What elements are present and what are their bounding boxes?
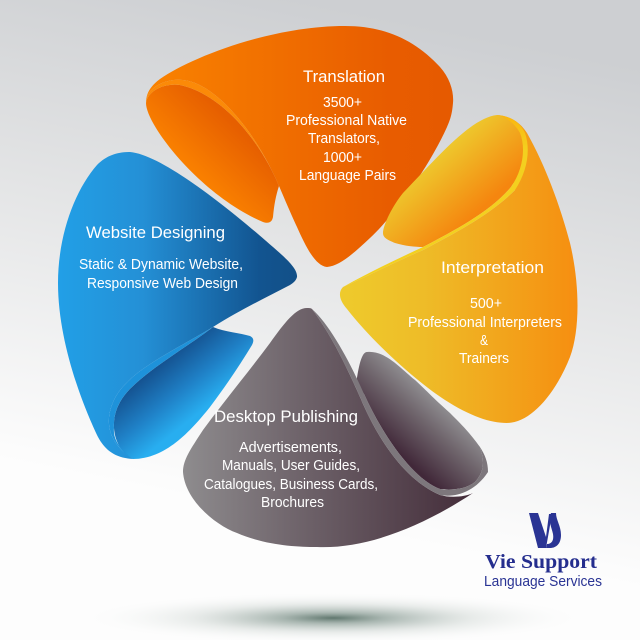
- company tagline: Language Services: [484, 574, 602, 590]
- orange fold: [146, 85, 279, 223]
- translation text: Language Pairs: [299, 168, 396, 184]
- desktop publishing text: Advertisements,: [239, 440, 342, 456]
- yellow fold: [383, 115, 523, 247]
- grey fold edge: [312, 309, 488, 496]
- orange petal: [146, 26, 453, 267]
- panel: desktop publishing: [183, 308, 488, 547]
- yellow fold edge: [343, 115, 528, 287]
- translation text: Translators,: [308, 131, 380, 147]
- interpretation heading: Interpretation: [441, 258, 544, 277]
- website text: [79, 257, 243, 292]
- interpretation text: 500+: [470, 296, 502, 312]
- icon: VS monogram: [529, 513, 561, 548]
- translation text: Professional Native: [286, 113, 407, 129]
- blue fold: [114, 327, 253, 459]
- ground shadow: [78, 592, 588, 640]
- website text: Static & Dynamic Website,: [79, 257, 243, 273]
- translation text: 3500+: [323, 95, 362, 111]
- interpretation text: &: [480, 333, 488, 349]
- grey petal: [183, 308, 473, 547]
- logo: [484, 513, 602, 590]
- interpretation text: Professional Interpreters: [408, 315, 562, 331]
- blue petal: [58, 152, 297, 459]
- website text: Responsive Web Design: [87, 276, 238, 292]
- website heading: Website Designing: [86, 223, 225, 242]
- desktop publishing text: Manuals, User Guides,: [222, 458, 360, 474]
- panel: interpretation: [340, 115, 578, 423]
- translation text: [286, 95, 407, 184]
- grey fold: [356, 352, 483, 489]
- blue fold edge: [109, 327, 213, 459]
- orange fold edge: [146, 80, 279, 186]
- desktop publishing text: Catalogues, Business Cards,: [204, 477, 378, 493]
- desktop publishing text: [204, 440, 378, 511]
- company name: Vie Support: [485, 551, 597, 573]
- panel: website designing: [58, 152, 297, 459]
- yellow petal: [340, 115, 578, 423]
- interpretation text: [408, 296, 562, 367]
- desktop publishing heading: Desktop Publishing: [214, 407, 358, 426]
- translation text: 1000+: [323, 150, 362, 166]
- interpretation text: Trainers: [459, 351, 509, 367]
- translation heading: Translation: [303, 67, 385, 86]
- desktop publishing text: Brochures: [261, 495, 324, 511]
- panel: translation: [146, 26, 453, 267]
